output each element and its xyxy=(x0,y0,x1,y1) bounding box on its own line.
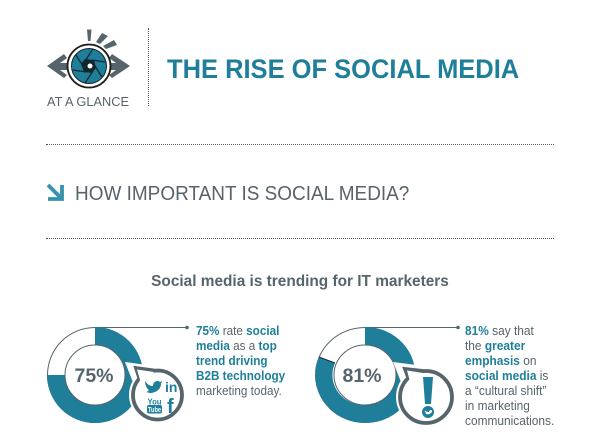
leader line xyxy=(365,326,460,329)
text block: 81%: a “cultural shift” xyxy=(465,384,546,398)
text block: 81%: the greater xyxy=(465,339,525,353)
text block: 75%: trend driving xyxy=(196,354,268,368)
text block: 75% xyxy=(196,324,285,398)
text block: 81%: in marketing xyxy=(465,399,530,413)
chart: 75% donut xyxy=(47,326,189,423)
logo caption: AT A GLANCE xyxy=(47,94,129,109)
facebook: f xyxy=(167,396,174,418)
value: 75% xyxy=(74,365,114,387)
icon: eye with aperture xyxy=(47,30,130,88)
text block: 75%: B2B technology xyxy=(196,369,285,383)
callout: exclamation xyxy=(393,362,454,425)
youtube: You xyxy=(148,398,162,406)
text block: 81%: social media is xyxy=(465,369,548,383)
text block: 81%: 81% say that xyxy=(465,324,534,338)
twitter xyxy=(145,381,162,393)
text block: 81%: communications. xyxy=(465,414,554,428)
twitter dot xyxy=(422,406,434,418)
icon: section arrow xyxy=(46,184,64,201)
value: 81% xyxy=(342,365,382,387)
youtube xyxy=(147,398,162,414)
chart: 81% donut xyxy=(315,326,460,423)
title: THE RISE OF SOCIAL MEDIA xyxy=(167,54,519,84)
text block: 81%: emphasis on xyxy=(465,354,536,368)
leader line xyxy=(95,326,189,329)
text block: 81% xyxy=(465,324,554,428)
callout: social icons xyxy=(125,362,184,422)
section heading: HOW IMPORTANT IS SOCIAL MEDIA? xyxy=(75,182,409,205)
text block: 75%: media as a top xyxy=(196,339,277,353)
subheading: Social media is trending for IT marketers xyxy=(151,273,449,290)
exclamation bar xyxy=(423,377,433,404)
linkedin: in xyxy=(165,379,177,395)
text block: 75%: 75% rate social xyxy=(196,324,279,338)
text block: 75%: marketing today. xyxy=(196,384,282,398)
vertical dotted divider xyxy=(148,28,149,106)
youtube: Tube xyxy=(148,407,161,414)
